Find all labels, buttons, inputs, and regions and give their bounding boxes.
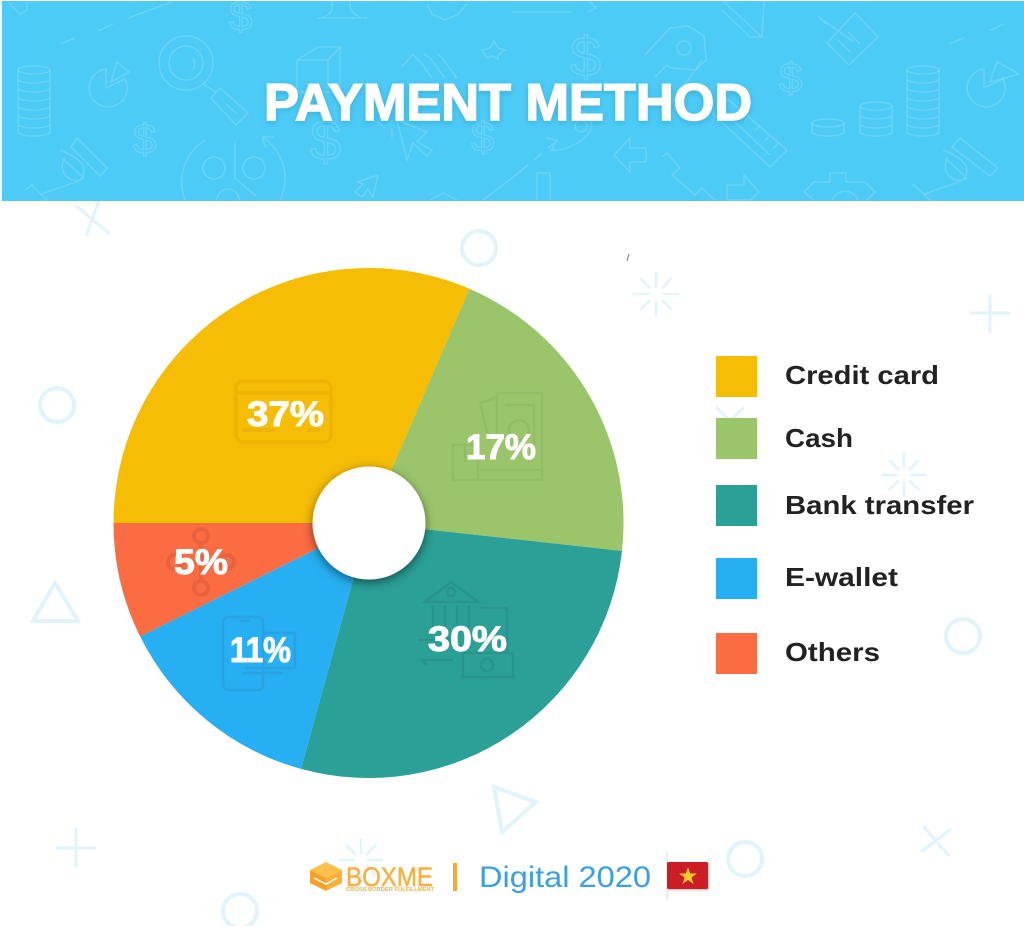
legend (716, 356, 974, 674)
boxme wordmark: BOXME (346, 862, 433, 892)
divider (453, 863, 457, 891)
legend: cash: Cash (785, 423, 853, 453)
icon: others nodes (168, 529, 234, 595)
banner dollar signs: $ (310, 109, 341, 172)
label: 37%: 37% (247, 395, 324, 434)
banner dollar signs (133, 0, 802, 172)
label: 5%: 5% (174, 543, 228, 582)
legend: credit card: Credit card (785, 360, 939, 390)
icon: credit card (236, 381, 331, 442)
icon: e-wallet phone (223, 617, 295, 690)
icon: cash (453, 393, 542, 480)
label: 17%: 17% (466, 428, 536, 467)
small tick mark (627, 254, 629, 261)
boxme tagline: CROSS BORDER FULFILLMENT (346, 887, 434, 893)
decorative background shapes (33, 201, 1010, 926)
legend: credit card (716, 356, 939, 397)
banner line-art icons (8, 0, 1019, 201)
legend: cash (716, 418, 853, 459)
pie chart (114, 268, 624, 778)
label: 30%: 30% (428, 620, 507, 659)
slice: others 5% (114, 523, 368, 636)
footer (310, 852, 708, 900)
title: PAYMENT METHOD (264, 74, 752, 132)
slice: cash 17% (368, 289, 624, 551)
banner dollar signs: $ (570, 25, 601, 88)
legend: others: Others (785, 637, 880, 667)
icon: boxme logo (310, 862, 342, 891)
slice: e-wallet 11% (140, 523, 368, 769)
legend: e-wallet (716, 558, 898, 599)
slice: bank transfer 30% (301, 523, 622, 778)
legend: others (716, 633, 880, 674)
icon: bank and money (418, 582, 513, 677)
digital 2020: Digital 2020 (479, 861, 651, 894)
header banner (2, 0, 1024, 201)
center hole (312, 466, 426, 580)
legend: bank transfer: Bank transfer (785, 490, 974, 520)
banner dollar signs: $ (779, 54, 802, 101)
legend: bank transfer (716, 485, 974, 526)
banner dollar signs: $ (133, 115, 156, 162)
label: 11%: 11% (230, 631, 291, 670)
icon: vietnam flag (667, 852, 708, 900)
legend: e-wallet: E-wallet (785, 562, 898, 592)
slice: credit card 37% (114, 268, 469, 523)
banner dollar signs: $ (471, 113, 494, 160)
